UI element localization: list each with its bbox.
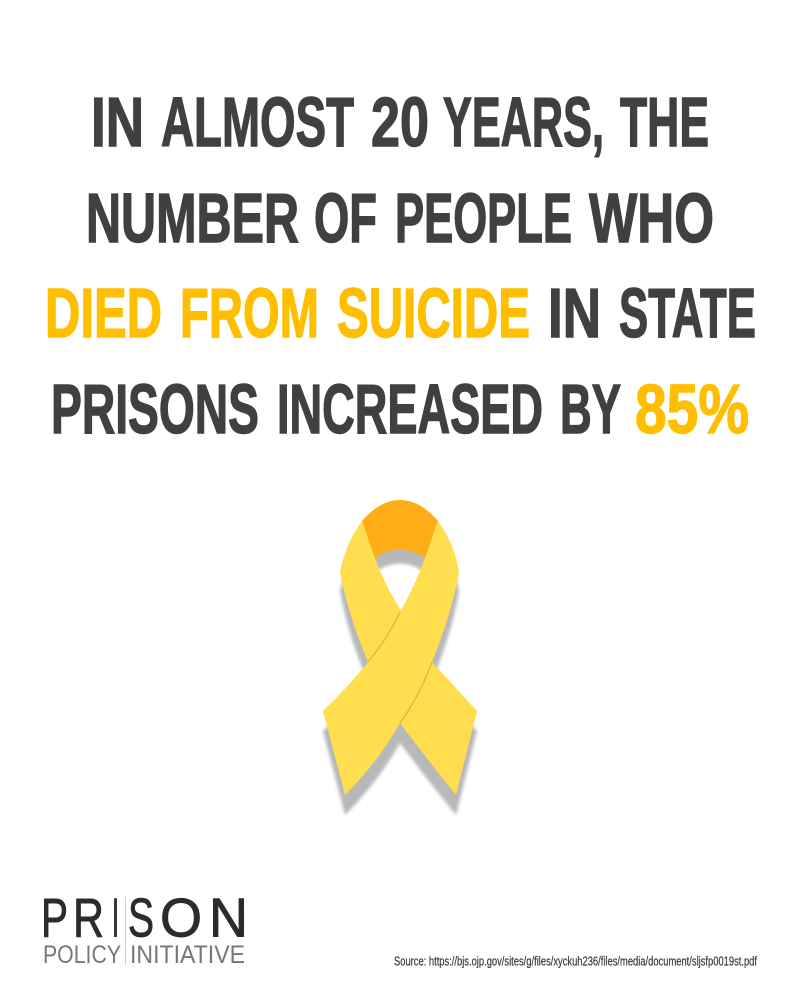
title: YEARS, [443, 83, 604, 161]
title: PEOPLE [395, 179, 572, 257]
ribbon fold lines [368, 612, 432, 723]
title: THE [620, 83, 709, 161]
logo word: PRISON: S [128, 886, 154, 948]
logo words: POLICY INITIATIVE [43, 941, 245, 969]
title: NUMBER [86, 179, 299, 257]
title: INCREASED [277, 370, 543, 448]
title: IN [91, 83, 144, 161]
logo: Prison Policy Initiative [41, 886, 248, 969]
logo word: PRISON: R [73, 886, 104, 948]
ribbon front band [323, 521, 459, 795]
title [45, 83, 756, 448]
ribbon back band [340, 521, 402, 662]
logo word: PRISON [41, 886, 248, 948]
ribbon loop opening [370, 564, 430, 625]
logo words: POLICY INITIATIVE: INITIATIVE [130, 941, 245, 969]
icon: yellow awareness ribbon [323, 500, 477, 815]
title: ALMOST [161, 83, 354, 161]
title: 85% [635, 370, 749, 448]
ribbon right tail [400, 662, 477, 795]
logo word: PRISON: O [160, 886, 202, 948]
logo words: POLICY INITIATIVE: POLICY [43, 941, 121, 969]
title: WHO [589, 179, 714, 257]
logo divider [124, 897, 126, 965]
logo word: PRISON: P [41, 886, 68, 948]
logo word: PRISON: N [209, 886, 248, 948]
title: 20 [371, 83, 429, 161]
title: DIED [45, 274, 162, 352]
title: BY [560, 370, 621, 448]
title: SUICIDE [337, 274, 530, 352]
title: FROM [180, 274, 319, 352]
ribbon orange top [362, 500, 438, 558]
title: IN [548, 274, 601, 352]
title: PRISONS [51, 370, 259, 448]
ribbon shadow [323, 520, 477, 815]
title: OF [314, 179, 377, 257]
logo word: PRISON: I [112, 886, 119, 948]
